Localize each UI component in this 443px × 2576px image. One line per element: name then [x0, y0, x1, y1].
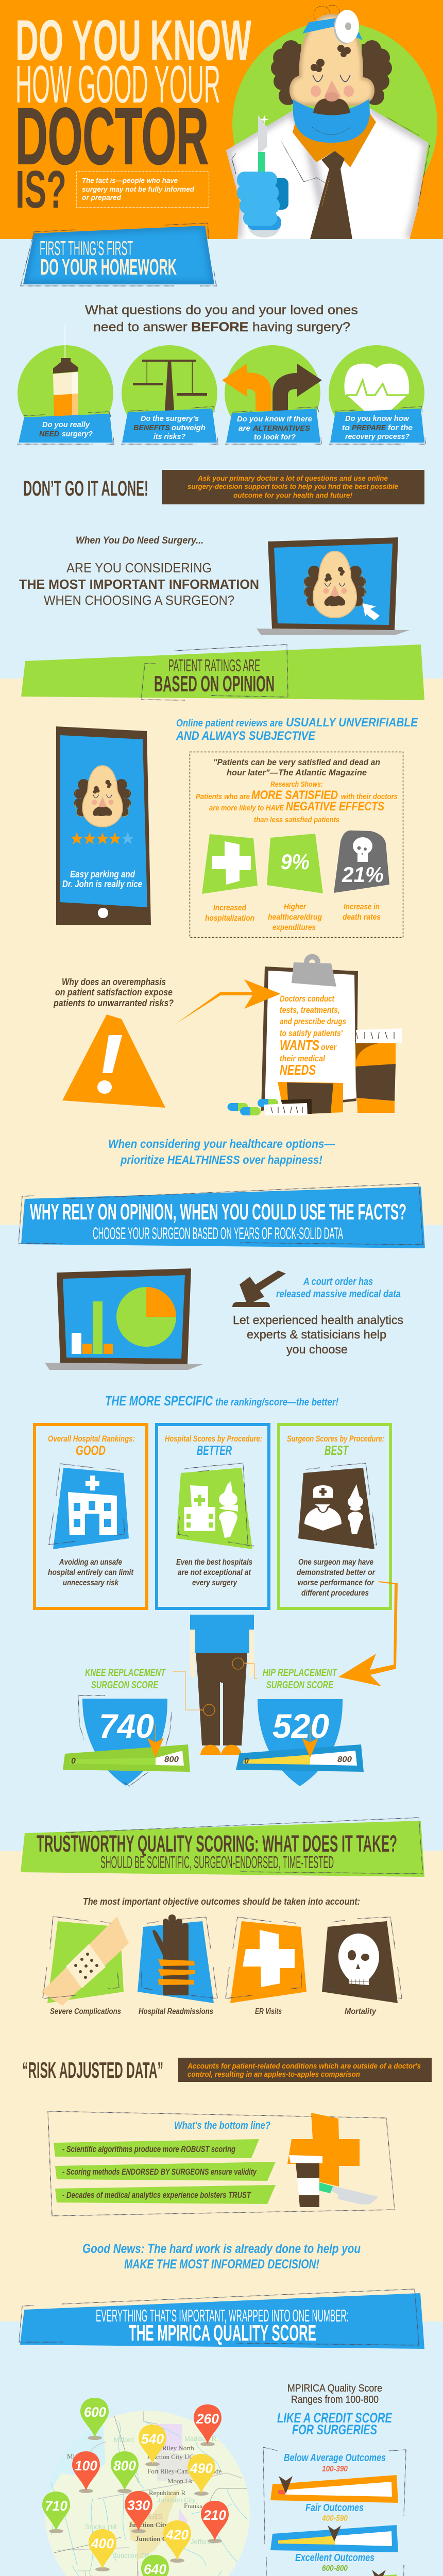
icon: hospital readmissions hand — [138, 1914, 217, 2003]
research text: than less satisfied patients — [254, 816, 339, 824]
panel: knee score: KNEE REPLACEMENT — [85, 1667, 166, 1679]
callout: risk adjusted definition: Accounts for patient-related conditions which are outside of a doctor's — [187, 2062, 421, 2071]
stat labels: death rates — [343, 913, 381, 922]
map: Smoky Hill — [85, 2523, 117, 2531]
intro callout: or prepared — [82, 193, 121, 201]
panel: hip score: SURGEON SCORE — [266, 1680, 333, 1691]
star rating — [71, 832, 134, 844]
icon: hospitalization cross — [202, 834, 258, 894]
banner: why rely on opinion — [19, 1183, 425, 1248]
text block: court order: Let experienced health analytics — [233, 1313, 403, 1327]
icon: doctor illustration — [226, 5, 437, 239]
panel: better: BETTER — [197, 1443, 232, 1458]
gauge: fair — [270, 2502, 398, 2552]
pin: 540: 540 — [141, 2431, 164, 2447]
outcome labels: Severe Complications — [50, 2007, 121, 2016]
text block: overemphasis question: Why does an overemphasis — [62, 977, 166, 987]
panel: good: unnecessary risk — [63, 1579, 119, 1587]
text: wants over needs: tests, treatments, — [280, 1005, 340, 1015]
panel: best: worse performance for — [298, 1579, 374, 1587]
research text: Research Shows: — [270, 780, 323, 789]
map: Moon Lk — [167, 2477, 193, 2485]
map: Junction City — [113, 2552, 152, 2560]
map: Republican R — [149, 2489, 185, 2497]
pin: 800: 800 — [113, 2458, 136, 2473]
text: wants over needs: over — [321, 1042, 337, 1052]
outcome labels: Mortality — [345, 2007, 377, 2016]
text: wants over needs: their medical — [280, 1054, 326, 1063]
heading: risk adjusted data: “RISK ADJUSTED DATA” — [22, 2058, 163, 2083]
text block: good news: MAKE THE MOST INFORMED DECISION! — [124, 2257, 319, 2272]
stat labels: Higher — [284, 903, 306, 911]
text: wants over needs: NEEDS — [280, 1062, 316, 1078]
panel: recovery — [329, 345, 425, 444]
text block: court order: you choose — [286, 1343, 348, 1356]
banner: trustworthy quality scoring — [21, 1818, 424, 1877]
research text: Patients who are — [196, 792, 250, 801]
callout: ask your doctor: Ask your primary doctor a lot of questions and use online — [197, 474, 388, 482]
icon: laptop with doctor — [257, 537, 410, 635]
callout: risk adjusted definition — [178, 2058, 432, 2082]
panel: knee score — [63, 1667, 190, 1786]
text block: overemphasis question: on patient satisfaction expose — [55, 987, 173, 997]
map: Riley North — [162, 2444, 194, 2452]
icon: phone with review: Easy parking and — [70, 869, 135, 879]
pin: 490: 490 — [190, 2461, 213, 2476]
intro callout: The fact is—people who have — [82, 176, 178, 184]
text block: court order — [233, 1276, 403, 1356]
panel: better: Hospital Scores by Procedure: — [165, 1434, 262, 1444]
icon: pill bottle tall — [355, 1028, 402, 1113]
text block: court order: A court order has — [303, 1276, 373, 1287]
bullet: robust scoring — [54, 2139, 259, 2158]
callout: ask your doctor — [162, 470, 424, 504]
stat labels: expenditures — [272, 923, 316, 932]
banner: patient ratings — [21, 645, 424, 700]
text block: good news — [82, 2242, 361, 2272]
heading: online reviews: USUALLY UNVERIFIABLE — [286, 716, 418, 730]
text: wants over needs: to satisfy patients' — [280, 1028, 343, 1038]
quote: hour later"—The Atlantic Magazine — [227, 768, 367, 777]
text: wants over needs: and prescribe drugs — [280, 1016, 346, 1026]
heading: questions before surgery: need to answer BEFORE having surgery? — [93, 320, 350, 334]
text block: score range — [277, 2383, 393, 2437]
banner: do your homework: FIRST THING'S FIRST — [40, 238, 133, 260]
map: Mi — [67, 2452, 75, 2460]
stat: 9 percent — [267, 834, 323, 893]
icon: laptop with charts — [45, 1268, 203, 1370]
banner: mpirica quality score — [19, 2289, 424, 2349]
callout: ask your doctor: outcome for your health and future! — [233, 491, 352, 499]
research text: MORE SATISFIED — [251, 788, 338, 802]
stat labels: healthcare/drug — [268, 913, 322, 922]
icon: pill bottle and pills — [228, 1082, 343, 1115]
pie chart — [116, 1287, 176, 1347]
panel: do you need surgery: surgery? — [62, 430, 93, 438]
stat labels: hospitalization — [205, 914, 254, 923]
gauge: below average: 100-390 — [322, 2465, 348, 2473]
pin: 260 — [194, 2404, 222, 2446]
icon: ER visits cross — [226, 1917, 306, 2003]
pin: 400 — [89, 2529, 116, 2571]
text: wants over needs: Doctors conduct — [280, 994, 335, 1004]
heading: the more specific — [105, 1393, 338, 1409]
panel: clipboard — [261, 954, 358, 1111]
banner: patient ratings: BASED ON OPINION — [154, 671, 275, 697]
panel: good: Overall Hospital Rankings: — [48, 1434, 135, 1444]
gauge: below average — [270, 2452, 398, 2503]
pills — [228, 1099, 278, 1115]
icon: syringe — [53, 325, 78, 418]
title: IS? — [15, 160, 66, 219]
icon: hospital — [49, 1464, 129, 1549]
pin: 260: 260 — [196, 2411, 219, 2427]
pin: 640 — [141, 2555, 169, 2576]
pin: 100: 100 — [75, 2458, 97, 2473]
map — [45, 2411, 250, 2576]
callout: ask your doctor: surgery-decision support tools to help you find the best possible — [188, 482, 398, 490]
panel: do you need surgery: NEED — [39, 430, 59, 438]
text block: score range: MPIRICA Quality Score — [287, 2383, 382, 2394]
icon: heart with pulse — [344, 364, 409, 411]
stat: 9 percent: 9% — [281, 850, 310, 874]
panel: good: Avoiding an unsafe — [59, 1558, 122, 1567]
title: DO YOU KNOW — [15, 8, 251, 73]
text block: good news: Good News: The hard work is already done to help you — [82, 2242, 361, 2256]
map: Madison R. — [184, 2435, 218, 2443]
panel: alternatives: to look for? — [254, 433, 296, 442]
panel: good: hospital entirely can limit — [48, 1568, 134, 1577]
panel: benefits vs risks: BENEFITS — [133, 423, 170, 432]
pin: 600 — [80, 2398, 109, 2440]
panel: best: different procedures — [301, 1589, 369, 1598]
outcome labels: ER Visits — [255, 2007, 282, 2016]
callout: prioritize healthiness: When considering your healthcare options— — [108, 1137, 335, 1150]
map: Junction City — [129, 2521, 168, 2529]
pin: 600: 600 — [84, 2404, 106, 2420]
icon: body figure — [173, 1615, 258, 1755]
icon: phone with review — [56, 726, 151, 925]
panel: do you need surgery — [17, 325, 114, 444]
heading: the more specific: the ranking/score—the better! — [215, 1397, 338, 1408]
icon: shield — [82, 1699, 167, 1786]
title — [15, 8, 251, 219]
title: DOCTOR — [15, 92, 209, 181]
gauge: fair: Fair Outcomes — [305, 2502, 364, 2514]
text: wants over needs: WANTS — [280, 1037, 319, 1053]
text block: score range: LIKE A CREDIT SCORE — [277, 2410, 393, 2426]
icon: hospital and joint — [176, 1463, 253, 1549]
map: Franks — [184, 2502, 202, 2510]
callout: risk adjusted definition: control, resulting in an apples-to-apples comparison — [188, 2071, 360, 2079]
panel: best: demonstrated better or — [297, 1568, 376, 1577]
gauge: excellent — [270, 2552, 398, 2576]
heading: online reviews: AND ALWAYS SUBJECTIVE — [176, 729, 316, 743]
pin: 420: 420 — [165, 2527, 189, 2543]
stat labels — [205, 903, 381, 932]
panel: hip score: 520 — [272, 1707, 329, 1745]
panel: benefits vs risks: Do the surgery's — [141, 414, 199, 423]
panel: research box — [190, 752, 403, 938]
bar chart — [72, 1301, 113, 1354]
gauge: excellent: Excellent Outcomes — [295, 2552, 374, 2564]
bullet: endorsed by surgeons: - Scoring methods ENDORSED BY SURGEONS ensure validity — [62, 2167, 257, 2177]
heading: questions before surgery: What questions do you and your loved ones — [85, 303, 358, 317]
heading: don't go it alone: DON’T GO IT ALONE! — [23, 476, 148, 500]
pin: 100 — [72, 2451, 100, 2493]
callout: prioritize healthiness — [108, 1137, 335, 1166]
panel: better: are not exceptional at — [178, 1568, 251, 1577]
heading: questions before surgery — [85, 303, 358, 334]
banner: do your homework: DO YOUR HOMEWORK — [40, 255, 177, 280]
text block: when you do need surgery: When You Do Need Surgery... — [76, 535, 203, 546]
panel: benefits vs risks — [121, 345, 218, 444]
map with score pins — [42, 2398, 250, 2576]
intro callout — [76, 171, 209, 207]
heading: objective outcomes: The most important objective outcomes should be taken into account: — [83, 1896, 360, 1907]
text block: court order: experts & statisicians help — [247, 1328, 386, 1341]
text block: score range: FOR SURGERIES — [292, 2422, 377, 2437]
panel: score gauges — [263, 2447, 406, 2576]
pin: 800 — [111, 2451, 139, 2493]
panel: better — [157, 1425, 269, 1608]
panel: hip score: 800 — [337, 1755, 352, 1764]
pin: 330 — [125, 2491, 152, 2533]
bullet: decades of experience: - Decades of medical analytics experience bolsters TRUST — [62, 2190, 251, 2200]
outcome labels — [50, 2007, 377, 2016]
pin: 490 — [188, 2454, 215, 2496]
panel: best: One surgeon may have — [298, 1558, 373, 1567]
pin: 210: 210 — [203, 2507, 226, 2523]
text block: when you do need surgery: ARE YOU CONSIDERING — [66, 560, 212, 575]
stat: 21 percent: 21% — [342, 862, 384, 887]
map: Junction City — [157, 2496, 196, 2504]
panel: knee score: 800 — [164, 1755, 179, 1764]
heading: the more specific: THE MORE SPECIFIC — [105, 1393, 213, 1409]
gauge: below average: Below Average Outcomes — [284, 2452, 386, 2464]
icon: severe complications bandage — [41, 1917, 129, 2006]
panel: alternatives — [222, 345, 322, 444]
outcome labels: Hospital Readmissions — [139, 2007, 213, 2016]
panel: recovery: Do you know how — [345, 414, 410, 423]
panel: hip score — [236, 1667, 364, 1786]
panel: best — [279, 1425, 390, 1608]
map: Junction C — [135, 2535, 167, 2543]
gauge: fair: 400-590 — [321, 2514, 348, 2523]
text block: overemphasis question: patients to unwarranted risks? — [53, 998, 174, 1008]
icon: mortality skull — [322, 1917, 402, 2003]
stat labels: Increase in — [344, 903, 380, 911]
panel: alternatives: ALTERNATIVES — [252, 424, 310, 433]
map: Jefferson — [191, 2538, 218, 2546]
panel: knee score: 0 — [71, 1757, 76, 1766]
icon: surgeon and joint — [298, 1463, 377, 1549]
gauge: excellent: 600-800 — [322, 2564, 348, 2573]
panel: hip score: HIP REPLACEMENT — [263, 1667, 337, 1679]
pin: 400: 400 — [91, 2536, 114, 2551]
panel: knee score: 740 — [99, 1707, 154, 1745]
stat: 21 percent — [334, 831, 389, 893]
panel: bottom line — [48, 2111, 395, 2216]
panel: benefits vs risks: outweigh — [172, 423, 206, 432]
banner: patient ratings: PATIENT RATINGS ARE — [168, 656, 260, 675]
callout: prioritize healthiness: prioritize HEALTHINESS over happiness! — [120, 1153, 322, 1166]
heading: online reviews — [176, 716, 418, 743]
panel: good — [35, 1425, 147, 1608]
pin: 330: 330 — [127, 2498, 150, 2513]
panel: alternatives: Do you know if there — [237, 415, 312, 423]
panel: benefits vs risks: its risks? — [154, 432, 185, 441]
banner: do your homework — [21, 223, 216, 286]
panel: recovery: for the — [388, 423, 413, 432]
icon: shield — [258, 1699, 343, 1786]
research text — [196, 780, 398, 824]
map: Milford — [114, 2436, 134, 2444]
panel: recovery: to — [342, 423, 350, 432]
pin: 710 — [42, 2492, 70, 2533]
panel: alternatives: are — [238, 424, 250, 433]
panel: good: GOOD — [76, 1443, 106, 1458]
icon: gavel — [232, 1270, 286, 1307]
quote — [213, 757, 380, 777]
icon: phone with review: Dr. John is really nice — [62, 879, 142, 889]
icon: cross with bottle and scalpel — [287, 2113, 379, 2207]
panel: do you need surgery: Do you really — [42, 420, 90, 429]
text block: score range: Ranges from 100-800 — [291, 2394, 379, 2405]
bullet: endorsed by surgeons — [55, 2162, 276, 2181]
icon: warning triangle — [62, 1014, 165, 1108]
panel: recovery: PREPARE — [352, 423, 386, 432]
heading: online reviews: Online patient reviews are — [176, 718, 283, 729]
text block: when you do need surgery: WHEN CHOOSING A SURGEON? — [44, 592, 234, 608]
text block: overemphasis question — [53, 977, 174, 1008]
research text: NEGATIVE EFFECTS — [286, 800, 384, 814]
research text: with their doctors — [341, 792, 398, 801]
panel: bottom line: What's the bottom line? — [174, 2120, 270, 2131]
panel: recovery: recovery process? — [345, 432, 410, 441]
pin: 540 — [139, 2425, 166, 2466]
intro callout: surgery may not be fully informed — [82, 185, 194, 193]
panel: best: Surgeon Scores by Procedure: — [287, 1434, 384, 1444]
text block: court order: released massive medical data — [276, 1289, 401, 1300]
panel: knee score: SURGEON SCORE — [91, 1680, 158, 1691]
bullet: robust scoring: - Scientific algorithms produce more ROBUST scoring — [62, 2144, 235, 2154]
map: Junction City UC — [147, 2453, 194, 2461]
pin: 710: 710 — [45, 2498, 67, 2514]
panel: hip score: 0 — [244, 1757, 249, 1766]
quote: "Patients can be very satisfied and dead an — [213, 757, 380, 767]
pin: 420 — [163, 2520, 191, 2563]
arrow: to clipboard — [175, 979, 281, 1024]
arrow: to hip score — [338, 1581, 398, 1686]
bullet: decades of experience — [55, 2185, 276, 2204]
text block: when you do need surgery: THE MOST IMPORTANT INFORMATION — [19, 577, 259, 592]
panel: better: every surgery — [192, 1579, 237, 1587]
map: sas — [147, 2511, 163, 2522]
stat labels: Increased — [213, 904, 247, 912]
text: wants over needs — [280, 994, 346, 1078]
research text: are more likely to HAVE — [209, 804, 284, 812]
map: Fort Riley-Camp Whiteside — [147, 2467, 222, 2475]
pin: 210 — [201, 2501, 229, 2543]
text block: when you do need surgery — [19, 535, 259, 608]
panel: best: BEST — [325, 1443, 349, 1458]
icon: balance scale — [133, 360, 207, 411]
panel: better: Even the best hospitals — [176, 1558, 252, 1567]
icon: diverging arrows — [222, 364, 322, 411]
